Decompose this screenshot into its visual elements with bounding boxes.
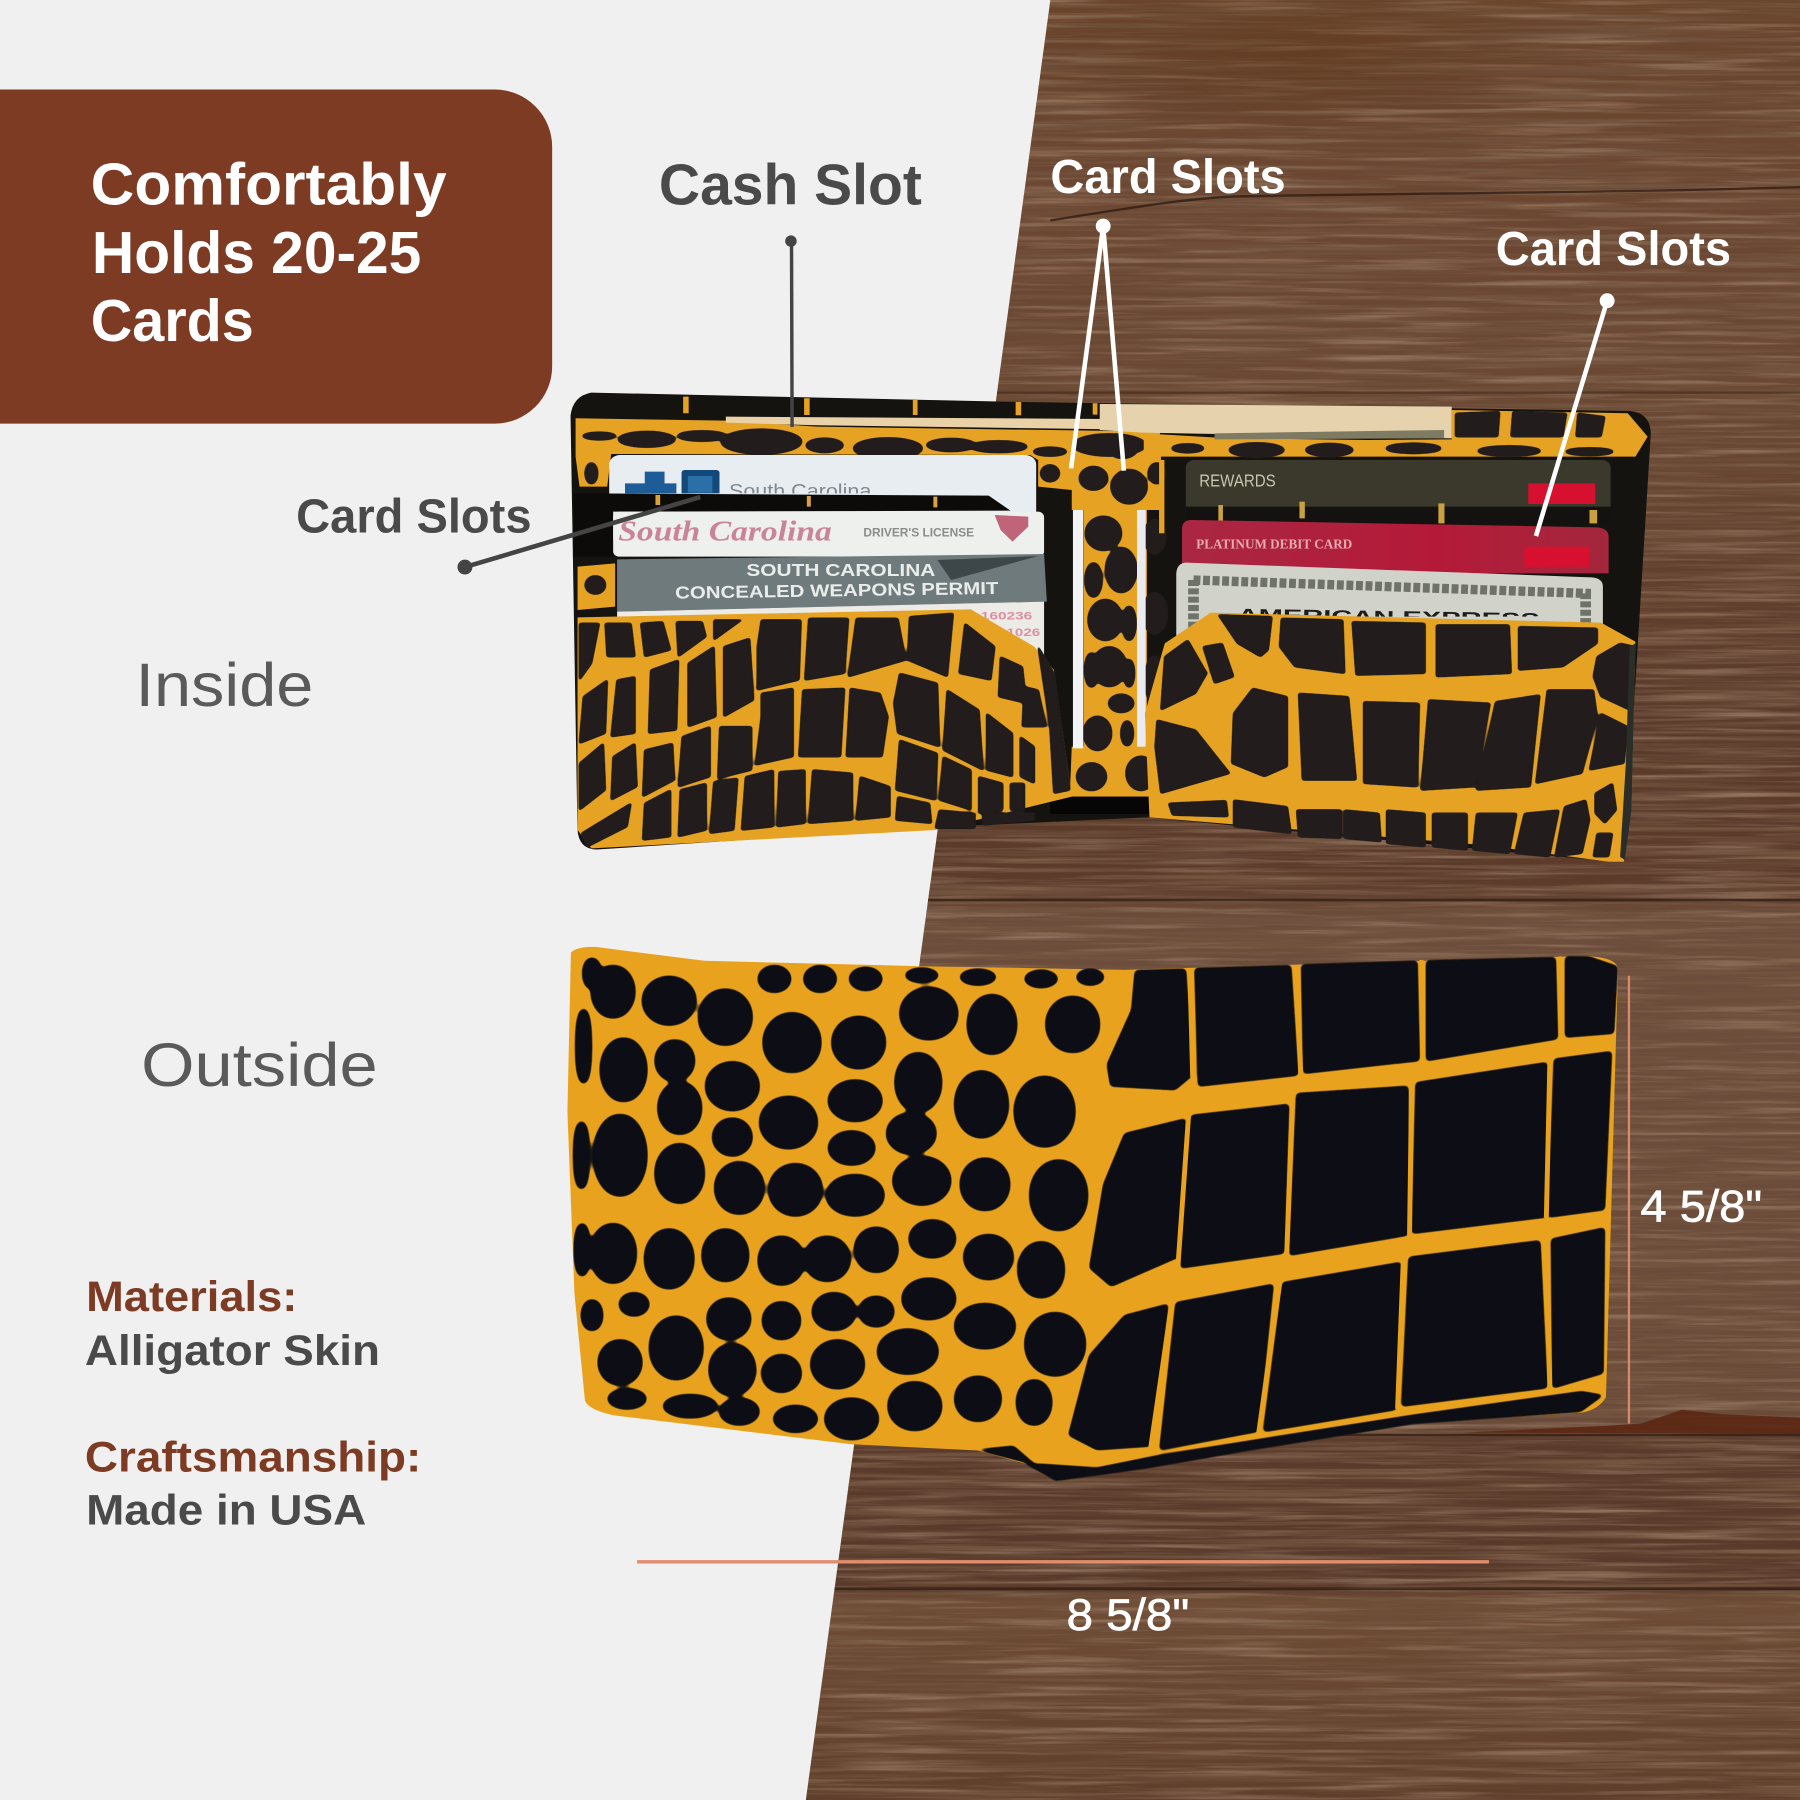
left pocket with scales — [578, 609, 1072, 848]
card: american express — [1176, 563, 1603, 637]
label: Inside: Inside — [135, 651, 313, 719]
card: lower pink number card — [617, 602, 1044, 657]
text block: craftsmanship — [85, 1434, 421, 1533]
card: american express: AMERICAN EXPRESS — [1237, 605, 1540, 629]
text block: materials: Materials: — [86, 1273, 297, 1320]
card: rewards: REWARDS — [1199, 471, 1276, 490]
card: platinum debit — [1182, 520, 1609, 573]
text block: materials — [85, 1273, 380, 1374]
heading box: Comfortably — [91, 150, 447, 217]
wallet: inside view — [571, 393, 1651, 862]
label: Outside: Outside — [141, 1031, 378, 1099]
white slot slit right — [1137, 510, 1146, 747]
dimension: height: 4 5/8" — [1640, 1181, 1762, 1231]
right half of inside wallet — [1100, 404, 1648, 862]
card: weapons permit: CONCEALED WEAPONS PERMIT — [675, 579, 999, 603]
label: Card Slots center: Card Slots — [1050, 150, 1286, 204]
text block: craftsmanship: Made in USA — [86, 1486, 366, 1533]
dimension: width: 8 5/8" — [1066, 1590, 1189, 1640]
heading box: Holds 20-25 — [92, 219, 421, 286]
label: Card Slots left: Card Slots — [296, 490, 532, 544]
card: blue insurance: South Carolina — [729, 481, 872, 502]
card: weapons permit: SOUTH CAROLINA — [746, 561, 936, 581]
label: Card Slots right — [1496, 222, 1731, 536]
wallet: outside view — [567, 947, 1618, 1481]
label: Cash Slot — [659, 153, 922, 427]
left half of inside wallet — [574, 397, 1167, 848]
card: lower pink number card: 1026 — [1007, 626, 1040, 639]
card: driver's license: DRIVER'S LICENSE — [863, 526, 974, 539]
text block: craftsmanship: Craftsmanship: — [85, 1434, 421, 1481]
card: platinum debit: PLATINUM DEBIT CARD — [1196, 537, 1352, 552]
text block: materials: Alligator Skin — [85, 1327, 380, 1374]
label: Card Slots right: Card Slots — [1496, 222, 1731, 276]
card: driver's license — [613, 512, 1044, 557]
outside left panel scales — [576, 959, 1101, 1439]
outside right panel scales — [978, 957, 1617, 1481]
label: Cash Slot: Cash Slot — [659, 153, 922, 217]
card: lower pink number card: 160236 — [981, 609, 1032, 622]
label: Card Slots left — [296, 490, 700, 575]
card: rewards — [1186, 460, 1611, 520]
card: weapons permit — [617, 554, 1047, 612]
white slot slit left — [1073, 510, 1083, 748]
background: wood planks — [792, 0, 1800, 1800]
heading box: Cards — [91, 287, 254, 354]
label: Card Slots center — [1050, 150, 1286, 471]
card: driver's license: South Carolina — [618, 515, 832, 547]
right pocket with scales — [1145, 613, 1635, 862]
heading box — [0, 90, 552, 424]
outside right panel thin yellow seams — [1150, 957, 1562, 1453]
card: blue insurance — [609, 455, 1036, 542]
